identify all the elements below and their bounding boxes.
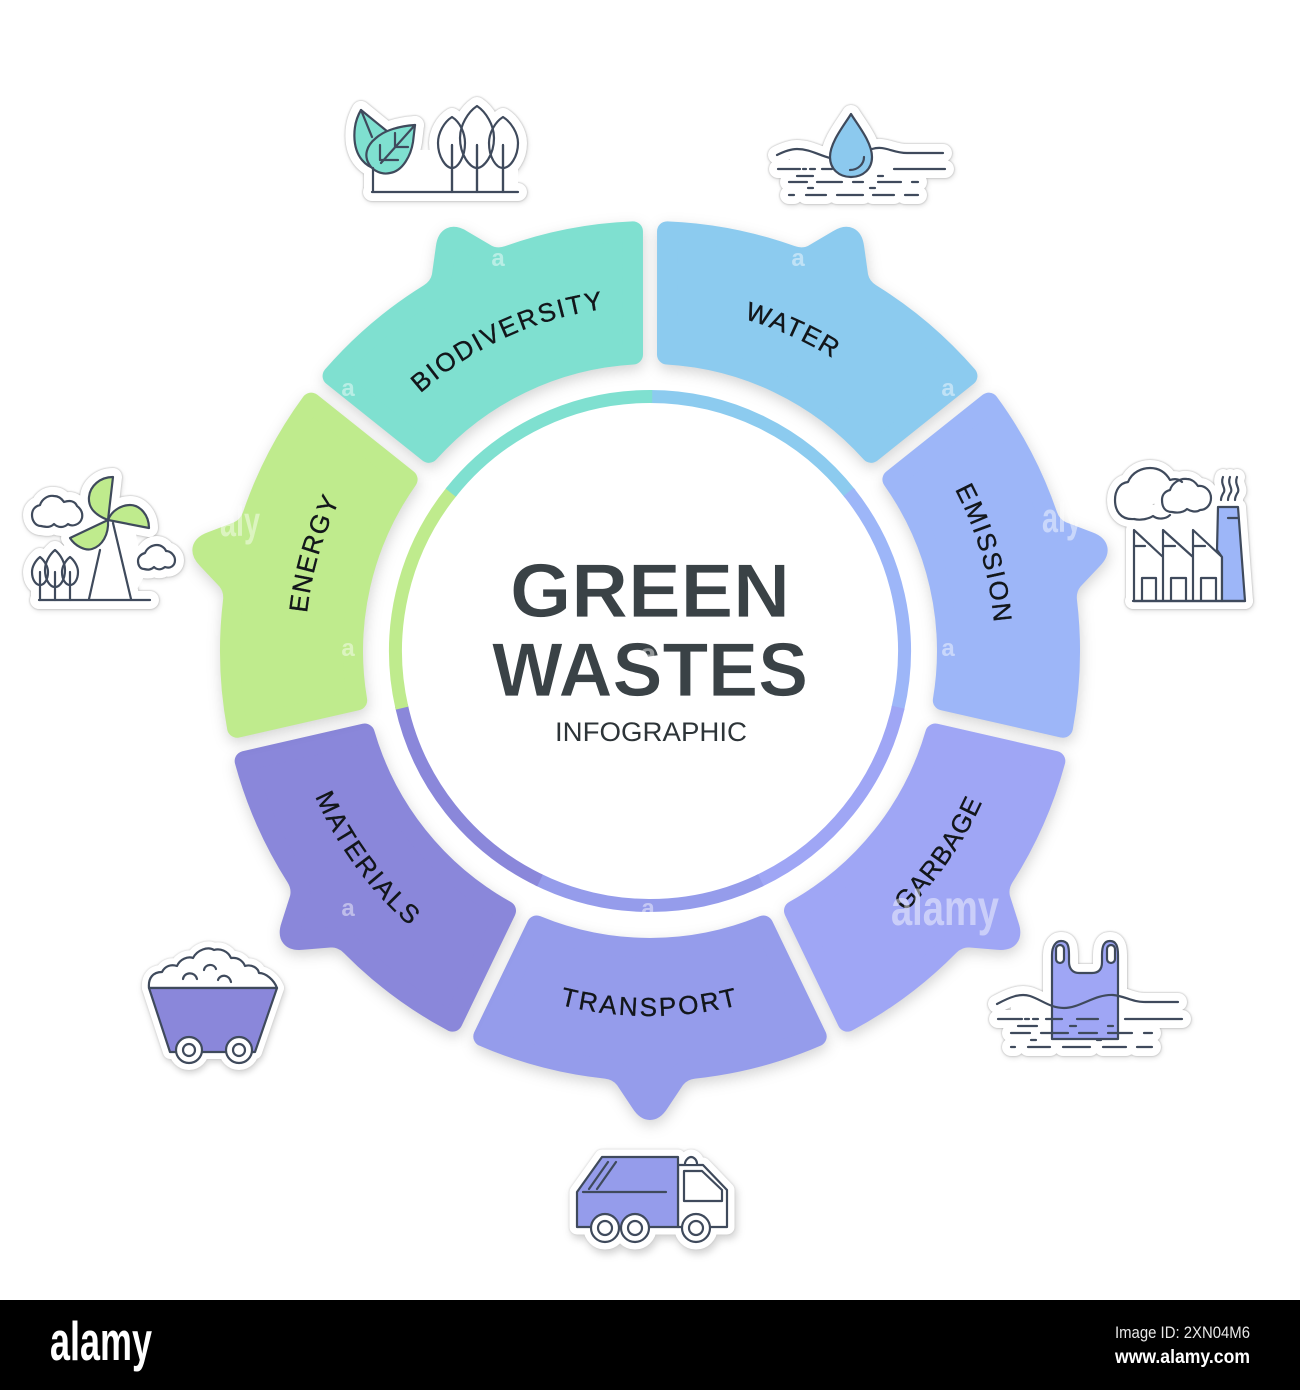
transport label: TRANSPORT <box>564 987 734 1016</box>
subtitle: infographic: INFOGRAPHIC <box>555 717 747 747</box>
panel: energy segment <box>189 392 422 748</box>
materials shape <box>187 692 539 1068</box>
watermark letters: alamy <box>891 880 999 936</box>
biodiversity shape <box>301 165 681 476</box>
panel: materials segment <box>232 724 521 1040</box>
footer bar <box>0 1300 1300 1390</box>
title: green wastes: GREEN <box>510 549 790 634</box>
garbage label: GARBAGE <box>896 796 982 908</box>
watermark letters: a <box>641 895 655 922</box>
emission label: EMISSION <box>956 482 1012 620</box>
panel: garbage segment <box>781 724 1070 1040</box>
panel: water segment <box>652 221 982 472</box>
footer website: www.alamy.com <box>1114 1347 1250 1368</box>
watermark letters: aly <box>220 498 260 545</box>
watermark letters: a <box>341 635 355 662</box>
icon: leaves and trees <box>354 106 518 192</box>
garbage shape <box>761 692 1113 1068</box>
footer logo: alamy: alamy <box>50 1310 152 1372</box>
energy shape <box>165 386 419 752</box>
footer image id: Image ID: 2XN04M6 <box>1115 1323 1250 1342</box>
title: green wastes <box>492 549 808 713</box>
icon: garbage truck <box>577 1157 727 1242</box>
watermark letters: a <box>941 375 955 402</box>
watermark letters: aly <box>1042 494 1082 541</box>
panel: transport segment <box>470 916 832 1130</box>
icon: wind turbine with trees <box>32 477 175 600</box>
watermark letters: a <box>640 638 657 671</box>
icon: factory with clouds <box>1115 468 1245 601</box>
watermark letters: a <box>341 375 355 402</box>
title: green wastes: WASTES <box>492 628 808 713</box>
biodiversity label: BIODIVERSITY <box>410 291 600 392</box>
icon: mine cart <box>149 948 277 1063</box>
materials label: MATERIALS <box>316 790 419 924</box>
water label: WATER <box>749 302 838 358</box>
icon: water drop <box>777 114 945 195</box>
icon: plastic bag in water <box>997 941 1182 1047</box>
panel: emission segment <box>880 392 1113 747</box>
water shape <box>619 165 999 476</box>
watermark letters: a <box>941 635 955 662</box>
watermark letters: a <box>341 895 355 922</box>
emission shape <box>881 386 1135 752</box>
energy label: ENERGY <box>289 493 336 612</box>
watermark letters <box>220 245 1082 936</box>
panel: biodiversity segment <box>320 221 650 472</box>
central multi-colour ring <box>292 293 1008 1009</box>
transport shape <box>483 926 817 1110</box>
watermark letters: a <box>491 245 505 272</box>
watermark letters: a <box>791 245 805 272</box>
